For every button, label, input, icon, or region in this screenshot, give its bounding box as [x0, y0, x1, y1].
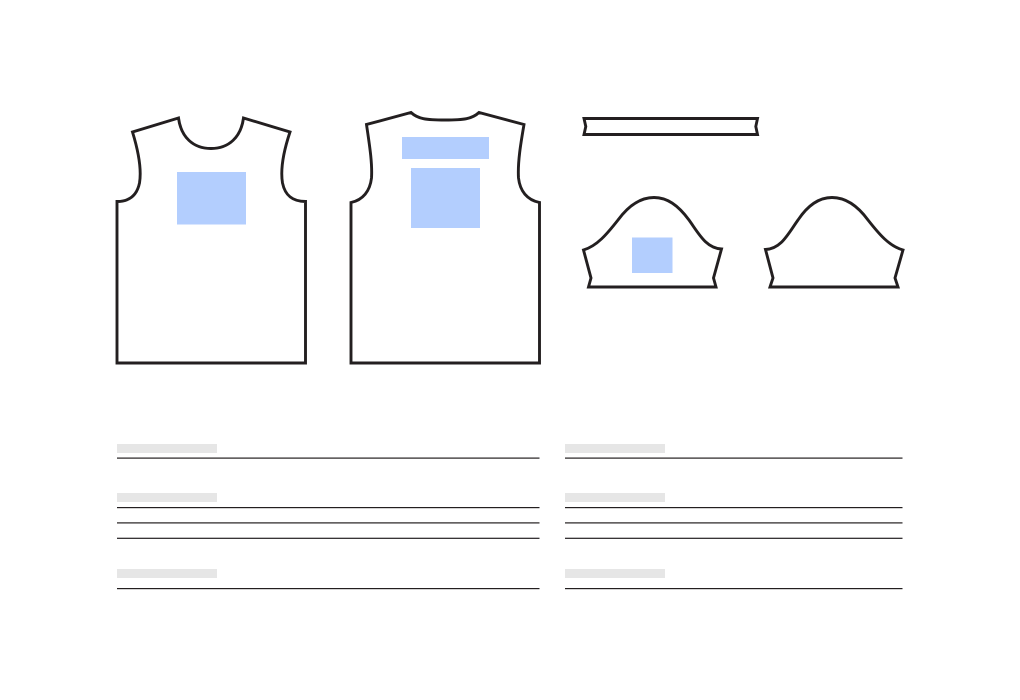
- back body outline: [351, 112, 540, 363]
- field 3 label bar: [117, 569, 217, 578]
- panel: front body: [117, 118, 306, 363]
- form fields: right column: [565, 444, 902, 589]
- panel: left sleeve: [584, 198, 722, 287]
- field 2 label bar: [117, 493, 217, 502]
- field 5 label bar: [565, 493, 665, 502]
- field 5 lines: [565, 507, 902, 539]
- front placement area: [177, 172, 246, 224]
- back upper placement area: [402, 137, 489, 159]
- field 3 line: [117, 588, 540, 589]
- field 6 label bar: [565, 569, 665, 578]
- field 6 line: [565, 588, 902, 589]
- panel: collar band: [584, 118, 758, 134]
- left sleeve outline: [584, 198, 722, 287]
- field 1 line: [117, 458, 540, 459]
- field 2 lines: [117, 507, 540, 539]
- field 4 label bar: [565, 444, 665, 453]
- front body outline: [117, 118, 306, 363]
- panel: back body: [351, 112, 540, 363]
- panel: right sleeve: [766, 198, 903, 287]
- back lower placement area: [411, 168, 480, 228]
- form fields: left column: [117, 444, 540, 589]
- field 4 line: [565, 458, 902, 459]
- sleeve placement area: [632, 238, 672, 273]
- field 1 label bar: [117, 444, 217, 453]
